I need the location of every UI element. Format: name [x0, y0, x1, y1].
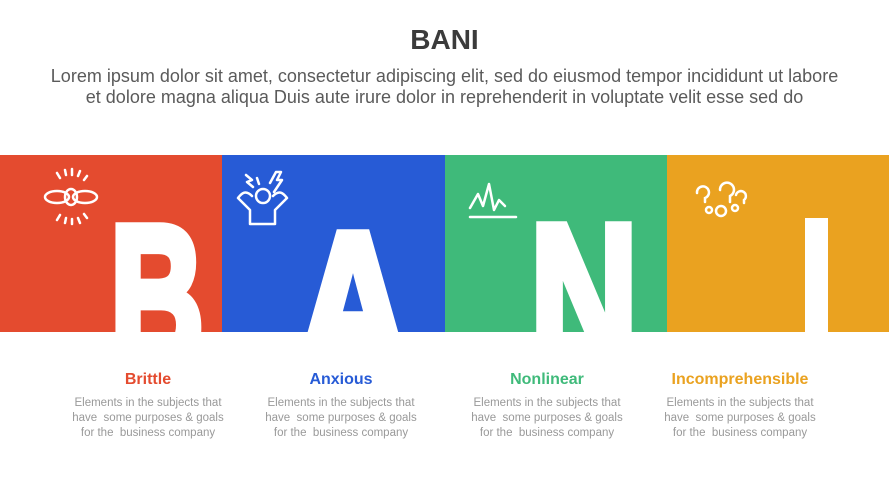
- item: Brittle: have some purposes & goals: [72, 412, 224, 424]
- item: Incomprehensible: [664, 371, 816, 439]
- item: Incomprehensible: for the business company: [673, 427, 807, 439]
- panel: B: [0, 155, 222, 332]
- item: Incomprehensible: Incomprehensible: [672, 371, 808, 388]
- panel: I: [667, 155, 889, 332]
- title: BANI: [410, 24, 479, 55]
- item: Nonlinear: [471, 371, 623, 439]
- item: Anxious: [265, 371, 417, 439]
- icon: line chart: [470, 184, 516, 217]
- icon: broken chain: [45, 169, 97, 224]
- item: Anxious: Anxious: [309, 371, 373, 388]
- item: Brittle: Elements in the subjects that: [74, 397, 222, 409]
- item: Incomprehensible: have some purposes & goals: [664, 412, 816, 424]
- panels band: [0, 155, 889, 332]
- item: Nonlinear: Elements in the subjects that: [473, 397, 621, 409]
- item: Nonlinear: have some purposes & goals: [471, 412, 623, 424]
- item: Nonlinear: Nonlinear: [510, 371, 584, 388]
- panel: N: [445, 155, 667, 332]
- item: Brittle: for the business company: [81, 427, 215, 439]
- subtitle: [51, 66, 838, 107]
- subtitle: et dolore magna aliqua Duis aute irure dolor in reprehenderit in voluptate velit esse sed do: [86, 87, 803, 107]
- subtitle: Lorem ipsum dolor sit amet, consectetur adipiscing elit, sed do eiusmod tempor incididunt ut labore: [51, 66, 838, 86]
- item: Anxious: Elements in the subjects that: [267, 397, 415, 409]
- item: Anxious: for the business company: [274, 427, 408, 439]
- item: Nonlinear: for the business company: [480, 427, 614, 439]
- icon: stressed head: [238, 172, 287, 224]
- icon: question marks: [697, 183, 746, 216]
- panel: A: [222, 155, 445, 332]
- item: Brittle: Brittle: [125, 371, 171, 388]
- item: Brittle: [72, 371, 224, 439]
- item: Anxious: have some purposes & goals: [265, 412, 417, 424]
- item: Incomprehensible: Elements in the subjects that: [666, 397, 814, 409]
